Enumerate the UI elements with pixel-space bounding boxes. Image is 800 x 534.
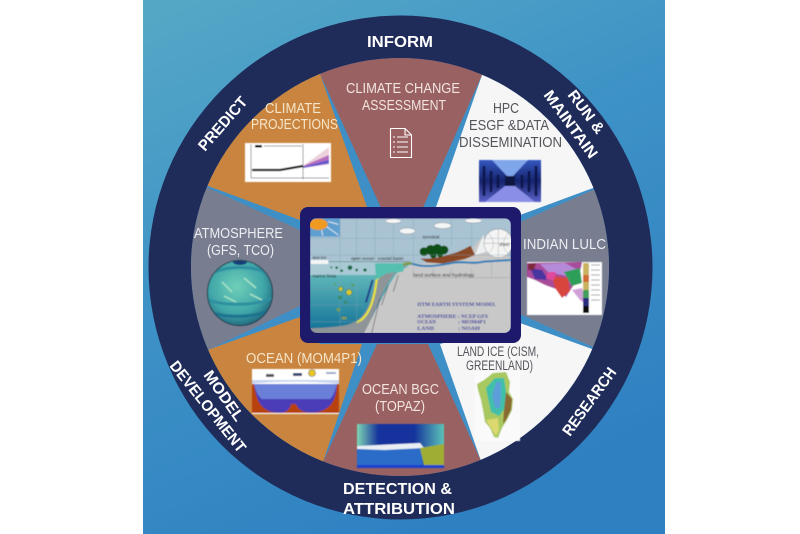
blue background panel bbox=[143, 0, 665, 534]
coastal basin: coastal basin bbox=[378, 256, 404, 262]
maintain: MAINTAIN bbox=[540, 87, 601, 162]
line two: ESGF &DATA bbox=[469, 118, 549, 134]
wedge: Indian LULC bbox=[521, 190, 609, 347]
ocean label: OCEAN bbox=[417, 321, 436, 326]
heading: land ice bbox=[457, 344, 539, 373]
wedge: ocean BGC bbox=[323, 344, 480, 476]
clouds bbox=[385, 218, 482, 234]
infographic bbox=[143, 0, 665, 534]
line two: GREENLAND) bbox=[466, 358, 533, 373]
centre panel: earth system model schematic bbox=[300, 207, 521, 343]
marine biota bbox=[330, 265, 367, 272]
image: data centre corridor bbox=[479, 160, 541, 202]
heading: climate projections bbox=[251, 101, 338, 133]
marine biota: marine biota bbox=[312, 273, 337, 279]
model: MODEL bbox=[200, 368, 247, 425]
sea ice: sea ice bbox=[312, 255, 327, 261]
line three: DISSEMINATION bbox=[459, 135, 562, 151]
ring label: predict: PREDICT bbox=[195, 93, 252, 155]
ring label: model development bbox=[166, 358, 249, 457]
wedge: land ice bbox=[440, 323, 592, 460]
chart: climate projection time series bbox=[245, 143, 331, 182]
line two: (GFS, TCO) bbox=[207, 243, 274, 259]
image: atmosphere model globe bbox=[208, 259, 272, 326]
terrestrial biota: terrestrial bbox=[423, 234, 439, 240]
land label: LAND bbox=[417, 327, 434, 332]
line two: PROJECTIONS bbox=[251, 117, 338, 133]
ring label: detection and attribution bbox=[343, 481, 455, 518]
ice sheet: sheet bbox=[499, 242, 510, 248]
heading: ocean: OCEAN (MOM4P1) bbox=[246, 351, 362, 367]
image: ocean biogeochemistry section bbox=[357, 424, 444, 468]
line one: LAND ICE (CISM, bbox=[457, 344, 539, 359]
wedge: climate projections bbox=[208, 74, 367, 220]
icon: document checklist bbox=[390, 128, 412, 158]
outer navy ring bbox=[148, 16, 652, 520]
heading: atmosphere bbox=[194, 226, 283, 259]
ring label: research: RESEARCH bbox=[559, 365, 620, 439]
atmosphere line: ATMOSPHERE : NCEP GFS bbox=[417, 315, 488, 320]
line one: OCEAN BGC bbox=[362, 382, 439, 398]
model description bbox=[417, 303, 497, 332]
line one: ATMOSPHERE bbox=[194, 226, 283, 242]
land value: : NOAH bbox=[458, 327, 480, 332]
image: Greenland ice map bbox=[475, 371, 520, 441]
ocean value: : MOM4P1 bbox=[458, 321, 487, 326]
line two: (TOPAZ) bbox=[375, 399, 425, 415]
open ocean: open ocean bbox=[351, 256, 375, 262]
inner blue disc bbox=[191, 58, 609, 476]
heading: climate change assessment bbox=[346, 81, 460, 114]
land surface: land surface and hydrology bbox=[413, 272, 475, 278]
line one: CLIMATE CHANGE bbox=[346, 81, 460, 97]
schematic picture bbox=[309, 218, 513, 333]
heading: Indian LULC: INDIAN LULC bbox=[523, 237, 606, 253]
image: ocean basin cross-section bbox=[252, 369, 339, 414]
attribution: ATTRIBUTION bbox=[343, 501, 455, 518]
diagram labels bbox=[312, 234, 510, 279]
ring label: inform: INFORM bbox=[367, 34, 433, 51]
line one: HPC bbox=[493, 101, 519, 117]
development: DEVELOPMENT bbox=[166, 358, 249, 457]
line two: ASSESSMENT bbox=[362, 98, 446, 114]
navy frame bbox=[300, 207, 521, 343]
image: land use map of India bbox=[527, 262, 602, 315]
run: RUN & bbox=[564, 87, 607, 137]
wedge: atmosphere bbox=[191, 188, 300, 349]
model title: IITM EARTH SYSTEM MODEL bbox=[417, 303, 497, 308]
heading: ocean BGC bbox=[362, 382, 439, 415]
heading: HPC ESGF and data dissemination bbox=[459, 101, 562, 151]
wedge: ocean bbox=[208, 317, 362, 462]
line one: CLIMATE bbox=[265, 101, 321, 117]
wedge: HPC bbox=[436, 74, 594, 215]
pie wedges bbox=[191, 58, 609, 476]
ring label: run and maintain bbox=[540, 87, 607, 162]
detection: DETECTION & bbox=[343, 481, 452, 498]
tree cluster bbox=[420, 244, 448, 258]
wedge: climate change assessment bbox=[320, 58, 482, 207]
